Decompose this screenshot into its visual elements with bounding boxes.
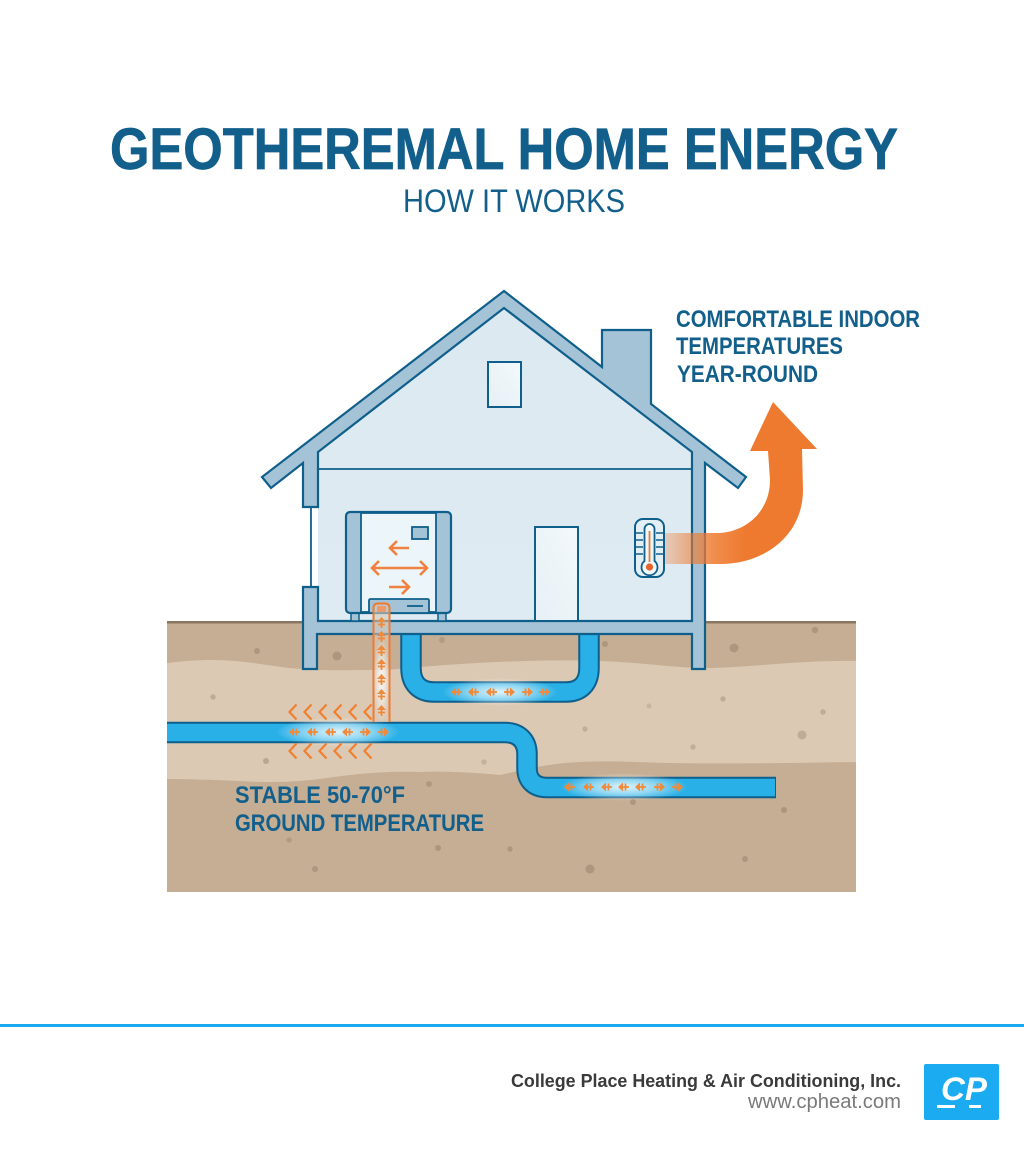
footer company text: www.cpheat.com: [747, 1091, 901, 1113]
icon: company logo: CP: [941, 1071, 988, 1107]
callout: indoor comfort: COMFORTABLE INDOOR: [676, 306, 920, 333]
callout: ground temperature: [235, 782, 484, 837]
title: GEOTHEREMAL HOME ENERGY: [110, 117, 898, 182]
unit control panel: [412, 527, 428, 539]
icon: thermostat: [635, 519, 664, 577]
pipe heat glow: upper run: [276, 717, 400, 747]
flow arrows: u-loop: [451, 688, 550, 696]
footer divider: [0, 1024, 1024, 1027]
warm air arrow: [665, 402, 817, 564]
icon: company logo: [924, 1064, 999, 1120]
unit arrows: [372, 541, 427, 594]
heat pump unit: [346, 512, 451, 621]
attic window: [488, 362, 521, 407]
heat exchange chevrons and arrows: [289, 704, 389, 758]
compressor base: [369, 599, 429, 613]
footer company text: [511, 1071, 901, 1113]
footer company text: College Place Heating & Air Conditioning, Inc.: [511, 1071, 901, 1091]
flow arrows: lower run: [564, 782, 683, 792]
panel: ground cross-section: [167, 621, 856, 892]
light soil band: [167, 660, 856, 782]
callout: indoor comfort: TEMPERATURES: [676, 333, 843, 360]
u-shaped loop pipe: [411, 633, 589, 706]
callout: indoor comfort: YEAR-ROUND: [677, 361, 818, 388]
soil speckles: [210, 627, 826, 874]
callout: ground temperature: GROUND TEMPERATURE: [235, 810, 484, 837]
subtitle: HOW IT WORKS: [403, 183, 625, 219]
callout: ground temperature: STABLE 50-70°F: [235, 782, 405, 809]
house frame, roof and chimney: [262, 291, 746, 669]
house structure: [262, 291, 746, 669]
vertical heat transfer pipe: [374, 604, 390, 722]
main ground loop pipe: [167, 717, 776, 801]
callout: indoor comfort: [676, 306, 920, 388]
interior door: [535, 527, 578, 621]
house interior: [318, 308, 692, 621]
pipe heat glow: lower run: [560, 773, 688, 801]
